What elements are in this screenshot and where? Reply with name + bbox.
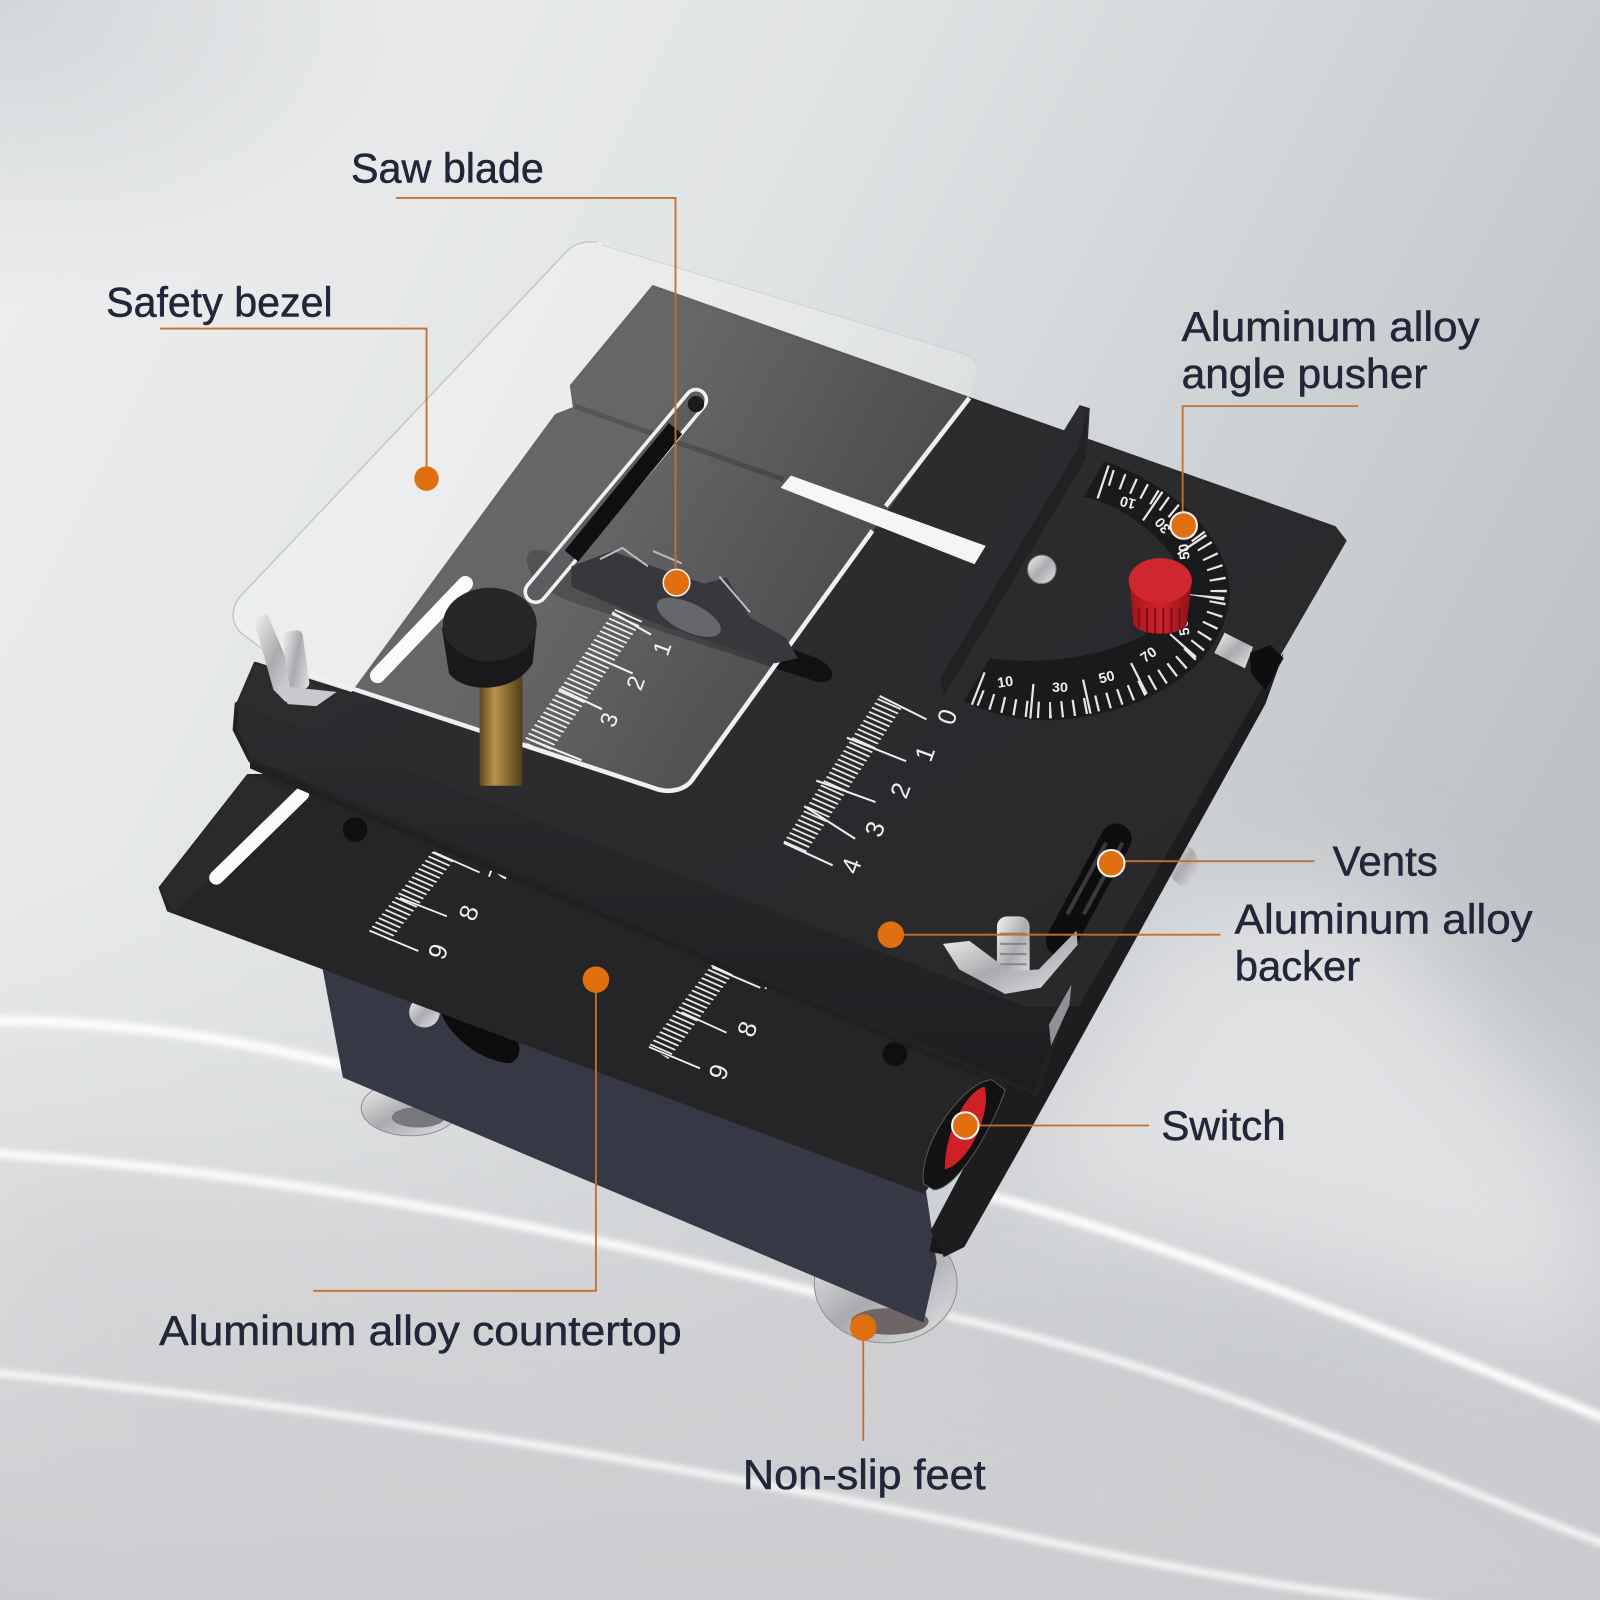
side clip [929, 1228, 947, 1254]
angle pusher protractor: 50 [1176, 543, 1194, 560]
red rocker [945, 1087, 986, 1169]
icon: brass post [480, 668, 522, 786]
label: aluminum alloy backer: Aluminum alloy [1235, 896, 1533, 943]
ruler: countertop right: 8 [732, 1018, 764, 1041]
skirt side gap [1049, 985, 1071, 1046]
angle pusher protractor: 50 [1175, 618, 1194, 637]
label: aluminum alloy angle pusher: angle pusher [1182, 350, 1428, 397]
leader line [1122, 860, 1314, 862]
switch [923, 1080, 1005, 1190]
right side flange [931, 653, 1284, 1257]
leader line [1183, 406, 1358, 526]
icon: black knob [442, 588, 537, 688]
black bar [571, 429, 676, 556]
marker dot [414, 466, 439, 491]
marker dot [952, 1112, 979, 1139]
ruler: front table: 0 [932, 706, 964, 729]
ruler: under acrylic: 1 [648, 638, 677, 659]
label: vents: Vents [1333, 838, 1438, 885]
ruler: countertop left: 8 [454, 902, 485, 925]
mitre slot [781, 476, 986, 564]
ruler: countertop left: 7 [483, 863, 515, 886]
countertop slot [216, 794, 302, 878]
marker dot [583, 966, 609, 993]
safety bezel acrylic [233, 242, 978, 791]
leader line [313, 980, 596, 1291]
ruler: under acrylic: 2 [621, 672, 650, 694]
long guide slot [536, 396, 704, 592]
marker dot [1170, 512, 1197, 539]
label: non-slip feet [743, 1314, 986, 1498]
housing slot [441, 1010, 520, 1063]
icon: countertop screws [343, 817, 367, 842]
table top plate [237, 287, 1345, 1005]
label: switch [952, 1102, 1286, 1149]
ruler: front table: 4 [836, 855, 868, 878]
leader line [396, 198, 676, 583]
shadow under skirt [250, 760, 1036, 1102]
ruler: countertop right: 9 [704, 1061, 735, 1084]
label: safety bezel: Safety bezel [106, 278, 333, 325]
saw blade [571, 548, 798, 663]
angle pusher protractor: 10 [996, 674, 1014, 692]
angle pusher protractor [964, 461, 1230, 720]
marker dot [663, 569, 690, 596]
angle pusher protractor: 30 [1052, 680, 1068, 696]
icon: angle gauge rail [1214, 633, 1284, 690]
vents [1061, 839, 1122, 941]
label: safety bezel [106, 278, 439, 491]
leader line [862, 1328, 864, 1441]
label: aluminum alloy countertop: Aluminum alloy countertop [159, 1307, 682, 1354]
angle pusher protractor: 70 [1138, 644, 1160, 667]
icon: left wing nut [253, 614, 337, 706]
leader line [898, 934, 1220, 936]
label: vents [1098, 838, 1438, 885]
ruler: countertop right [649, 964, 791, 1084]
label: saw blade: Saw blade [351, 145, 544, 192]
protractor long ticks [971, 482, 1207, 702]
marker dot [850, 1314, 877, 1341]
marker dot [878, 921, 904, 948]
label: aluminum alloy backer [878, 896, 1533, 990]
icon: housing screw [409, 997, 440, 1028]
ruler: under acrylic [523, 609, 677, 760]
ruler: under acrylic: 3 [595, 709, 623, 730]
protractor fine ticks [971, 478, 1219, 710]
label: aluminum alloy angle pusher [1170, 303, 1480, 539]
icon: left non-slip foot [361, 1081, 459, 1136]
ruler: front table: 2 [885, 779, 917, 802]
motor housing body [320, 957, 947, 1322]
fence [932, 405, 1090, 696]
aluminum countertop plate [160, 776, 1020, 1192]
ruler: countertop left [369, 850, 515, 963]
left slot [378, 584, 465, 676]
ruler: front table: 3 [860, 818, 891, 841]
angle pusher protractor: 10 [1118, 492, 1138, 512]
ruler: countertop left: 9 [423, 940, 454, 963]
icon: right non-slip foot [814, 1224, 957, 1343]
icon: rear foot [1169, 845, 1198, 886]
slab step shadow [574, 406, 784, 480]
ruler: countertop right: 7 [760, 975, 791, 998]
ruler: front table [784, 696, 964, 878]
marker dot [1098, 850, 1124, 877]
label: aluminum alloy countertop [159, 966, 682, 1354]
leader line [160, 329, 427, 479]
icon: fence screw [1028, 555, 1056, 584]
label: aluminum alloy backer: backer [1235, 943, 1360, 990]
label: saw blade [351, 145, 690, 596]
blade slot [527, 550, 832, 682]
label: switch: Switch [1161, 1102, 1286, 1149]
leader line [974, 1125, 1149, 1127]
angle pusher protractor: 30 [1152, 514, 1174, 536]
angle pusher protractor: 50 [1097, 668, 1116, 688]
label: non-slip feet: Non-slip feet [743, 1451, 986, 1498]
label: aluminum alloy angle pusher: Aluminum alloy [1182, 303, 1480, 350]
icon: red knob [1129, 558, 1192, 634]
table top front skirt [235, 704, 1078, 1094]
icon: right wing nut [943, 916, 1078, 994]
ruler: front table: 1 [910, 742, 941, 765]
